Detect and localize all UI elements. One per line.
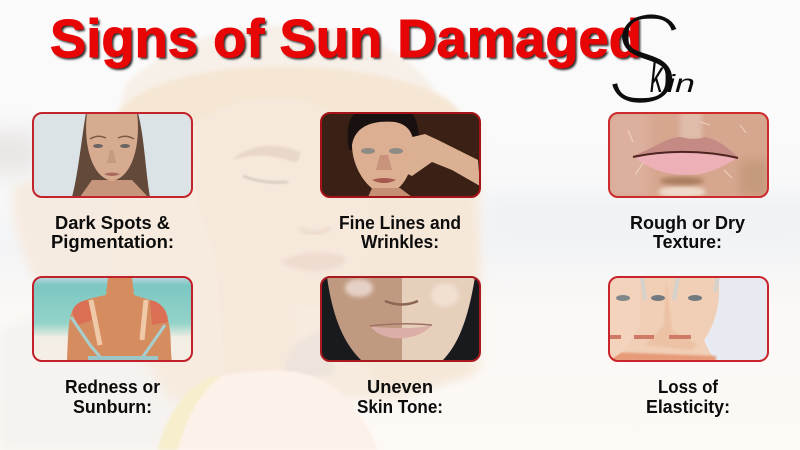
photo: woman touching forehead (321, 113, 480, 197)
card: fine lines (321, 113, 480, 252)
title: Signs of Sun Damaged (52, 11, 644, 71)
label: Rough or Dry (630, 213, 745, 233)
card: dark spots (33, 113, 192, 252)
card: uneven tone: Skin Tone: (357, 397, 443, 417)
label: Loss of (658, 377, 719, 397)
card: dark spots: Pigmentation: (51, 232, 174, 252)
photo: aging face progression (609, 277, 768, 361)
label: Fine Lines and (339, 213, 461, 233)
photo: split face comparison (321, 277, 480, 361)
title: Signs of Sun Damaged (50, 9, 642, 69)
card: rough texture (609, 110, 768, 252)
card: loss of elasticity: Elasticity: (646, 397, 730, 417)
photo: woman's face with pigmentation (33, 113, 192, 197)
card: uneven tone (321, 277, 480, 417)
photo: sunburnt back at the beach (33, 277, 192, 361)
label: Redness or (65, 377, 160, 397)
label: Uneven (367, 377, 433, 397)
card: sunburn: Sunburn: (73, 397, 152, 417)
label: Dark Spots & (55, 213, 170, 233)
photo: dry lips close-up (609, 110, 768, 198)
script word: Skin: k (650, 50, 664, 102)
card: sunburn (33, 277, 192, 417)
card: loss of elasticity (609, 277, 768, 417)
card: fine lines: Wrinkles: (361, 232, 439, 252)
script word: Skin: in (667, 70, 695, 98)
card: rough texture: Texture: (653, 232, 722, 252)
